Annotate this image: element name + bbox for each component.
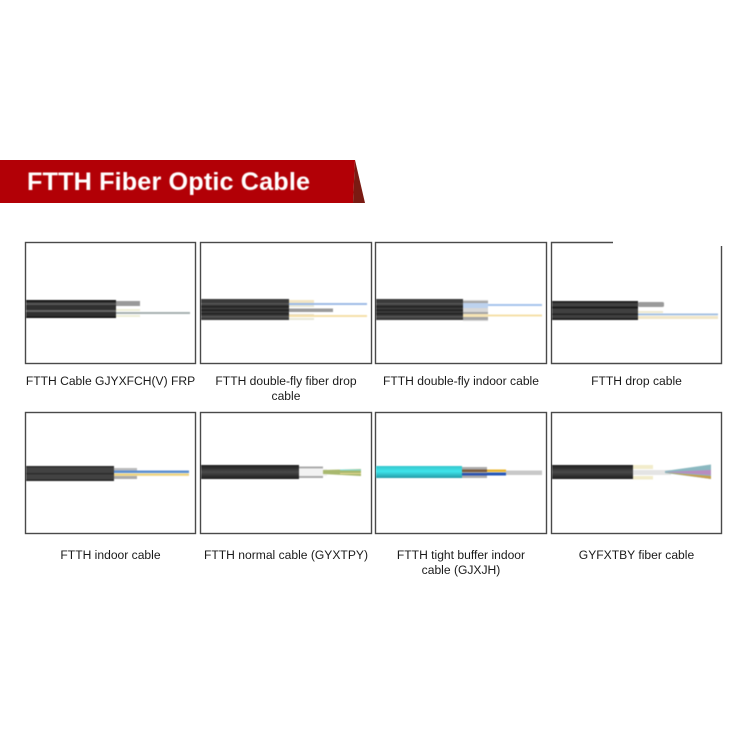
cable: normal GYXTPY: [201, 465, 361, 479]
caption: FTTH indoor cable: [60, 548, 161, 562]
cable: indoor: [26, 466, 189, 481]
panel: FTTH double-fly fiber drop cable: cable: [272, 389, 301, 403]
cable: double-fly indoor: [376, 299, 542, 321]
caption: FTTH drop cable: [591, 374, 682, 388]
panel: FTTH normal cable (GYXTPY): [200, 412, 372, 562]
panel: GYFXTBY fiber cable: [552, 412, 722, 562]
panel: FTTH double-fly fiber drop cable: [200, 242, 372, 403]
cable: drop: [552, 301, 718, 320]
title banner: [0, 160, 365, 203]
cable: double-fly fiber drop: [201, 299, 367, 320]
cable: tight buffer GJXJH: [376, 466, 542, 478]
panel: FTTH tight buffer indoor cable (GJXJH): [376, 412, 546, 577]
caption: FTTH Cable GJYXFCH(V) FRP: [26, 374, 195, 388]
caption: FTTH tight buffer indoor: [397, 548, 525, 562]
caption: GYFXTBY fiber cable: [579, 548, 694, 562]
cable: GYFXTBY: [552, 464, 711, 480]
title: FTTH Fiber Optic Cable: [27, 168, 310, 196]
caption: FTTH normal cable (GYXTPY): [204, 548, 368, 562]
panel: FTTH indoor cable: [26, 412, 196, 562]
panel: FTTH double-fly indoor cable: [376, 242, 546, 388]
panel: FTTH drop cable: [552, 242, 722, 388]
cable: GJYXFCH(V) FRP: [26, 300, 190, 318]
panel: FTTH tight buffer indoor cable (GJXJH): cable (GJXJH): [422, 563, 500, 577]
caption: FTTH double-fly indoor cable: [383, 374, 539, 388]
caption: FTTH double-fly fiber drop: [215, 374, 357, 388]
panel: FTTH Cable GJYXFCH(V) FRP: [26, 242, 196, 388]
